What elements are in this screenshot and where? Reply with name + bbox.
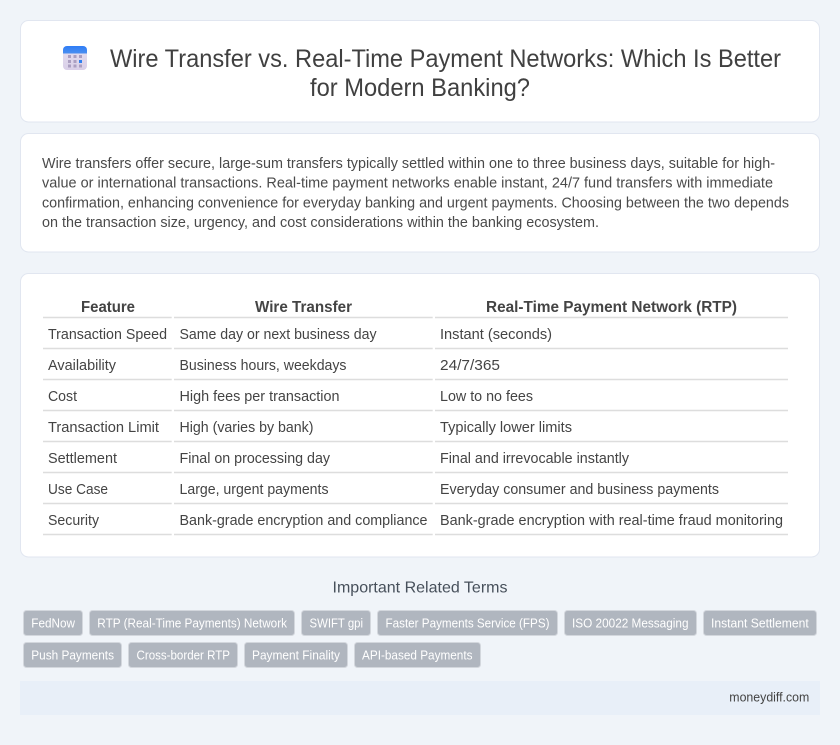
- tag: Faster Payments Service: Faster Payments Service (FPS): [386, 616, 550, 630]
- tag: ISO 20022 Messaging: [564, 610, 696, 636]
- tag: Cross-border RTP: [128, 642, 238, 668]
- row: transaction speed: Same day or next business day: [180, 327, 377, 343]
- tag: Instant Settlement: [704, 610, 816, 636]
- tag: API-based Payments: [354, 642, 480, 668]
- panel: comparison table: [20, 274, 820, 557]
- row: transaction speed: [48, 327, 552, 343]
- footer bar: [20, 681, 820, 715]
- tag: ISO 20022 Messaging: ISO 20022 Messaging: [572, 616, 689, 630]
- tag: Instant Settlement: Instant Settlement: [711, 616, 809, 630]
- row: settlement: Settlement: [48, 451, 117, 467]
- row: availability: Availability: [48, 358, 117, 374]
- tag: RTP network: [90, 610, 294, 636]
- row: security: Bank-grade encryption and compliance: [180, 513, 428, 529]
- table header row: Real-Time Payment Network (RTP): [486, 299, 737, 316]
- row: transaction speed: Transaction Speed: [48, 327, 167, 343]
- panel: introduction: [20, 134, 820, 252]
- title: Wire Transfer vs. Real-Time Payment Networks: Which Is Better: [110, 45, 781, 73]
- row: transaction speed: Instant (seconds): [440, 327, 552, 343]
- tag: SWIFT gpi: SWIFT gpi: [310, 616, 363, 630]
- row: transaction limit: High (varies by bank): [180, 420, 314, 436]
- tag: Push Payments: Push Payments: [31, 648, 114, 662]
- row: availability: 24/7/365: [440, 358, 500, 374]
- row: settlement: Final and irrevocable instantly: [440, 451, 630, 467]
- title: [110, 45, 781, 102]
- row: use case: Everyday consumer and business payments: [440, 482, 719, 498]
- tag: SWIFT gpi: [302, 610, 370, 636]
- row: cost: Low to no fees: [440, 389, 533, 405]
- heading: important related terms: Important Related Terms: [332, 580, 508, 597]
- text block: summary paragraph: Wire transfers offer secure, large-sum transfers typically settled within one to three business days, suitable for high-: [42, 156, 775, 172]
- tag: Payment Finality: [244, 642, 348, 668]
- row: transaction limit: Typically lower limits: [440, 420, 572, 436]
- row: use case: Large, urgent payments: [180, 482, 328, 498]
- panel: title header: [20, 20, 820, 122]
- tag: Payment Finality: Payment Finality: [252, 648, 341, 662]
- table header row: Feature: [81, 299, 135, 316]
- related terms tags: [24, 610, 816, 668]
- row: cost: High fees per transaction: [180, 389, 340, 405]
- text block: summary paragraph: [42, 156, 789, 231]
- row: cost: Cost: [48, 389, 77, 405]
- row: security: Bank-grade encryption with real-time fraud monitoring: [440, 513, 783, 529]
- row: availability: [48, 358, 500, 374]
- icon: calendar: [63, 46, 87, 70]
- tag: FedNow: FedNow: [31, 616, 76, 630]
- table header row: [81, 299, 737, 316]
- row: settlement: [48, 451, 630, 467]
- row: transaction limit: [48, 420, 572, 436]
- table header row: Wire Transfer: [255, 299, 352, 316]
- row: use case: [48, 482, 719, 498]
- footer source text: moneydiff.com: [729, 691, 809, 705]
- row: settlement: Final on processing day: [180, 451, 331, 467]
- row: security: Security: [48, 513, 100, 529]
- text block: summary paragraph: value or international transactions. Real-time payment networks enable instant, 24/7 fund transfers with immediate: [42, 176, 773, 192]
- row: security: [48, 513, 783, 529]
- tag: Push Payments: [24, 642, 122, 668]
- row: transaction limit: Transaction Limit: [48, 420, 159, 436]
- tag: Faster Payments Service: [378, 610, 558, 636]
- row: cost: [48, 389, 533, 405]
- text block: summary paragraph: on the transaction size, urgency, and cost considerations within the banking ecosystem.: [42, 215, 599, 231]
- row: availability: Business hours, weekdays: [180, 358, 346, 374]
- row: use case: Use Case: [48, 482, 108, 498]
- tag: Cross-border RTP: Cross-border RTP: [136, 648, 230, 662]
- text block: summary paragraph: confirmation, enhancing convenience for everyday banking and urgent payments. Choosing between the two depends: [42, 196, 789, 212]
- title: for Modern Banking?: [310, 74, 530, 102]
- tag: RTP network: RTP (Real-Time Payments) Network: [97, 616, 288, 630]
- tag: FedNow: [24, 610, 82, 636]
- tag: API-based Payments: API-based Payments: [362, 648, 472, 662]
